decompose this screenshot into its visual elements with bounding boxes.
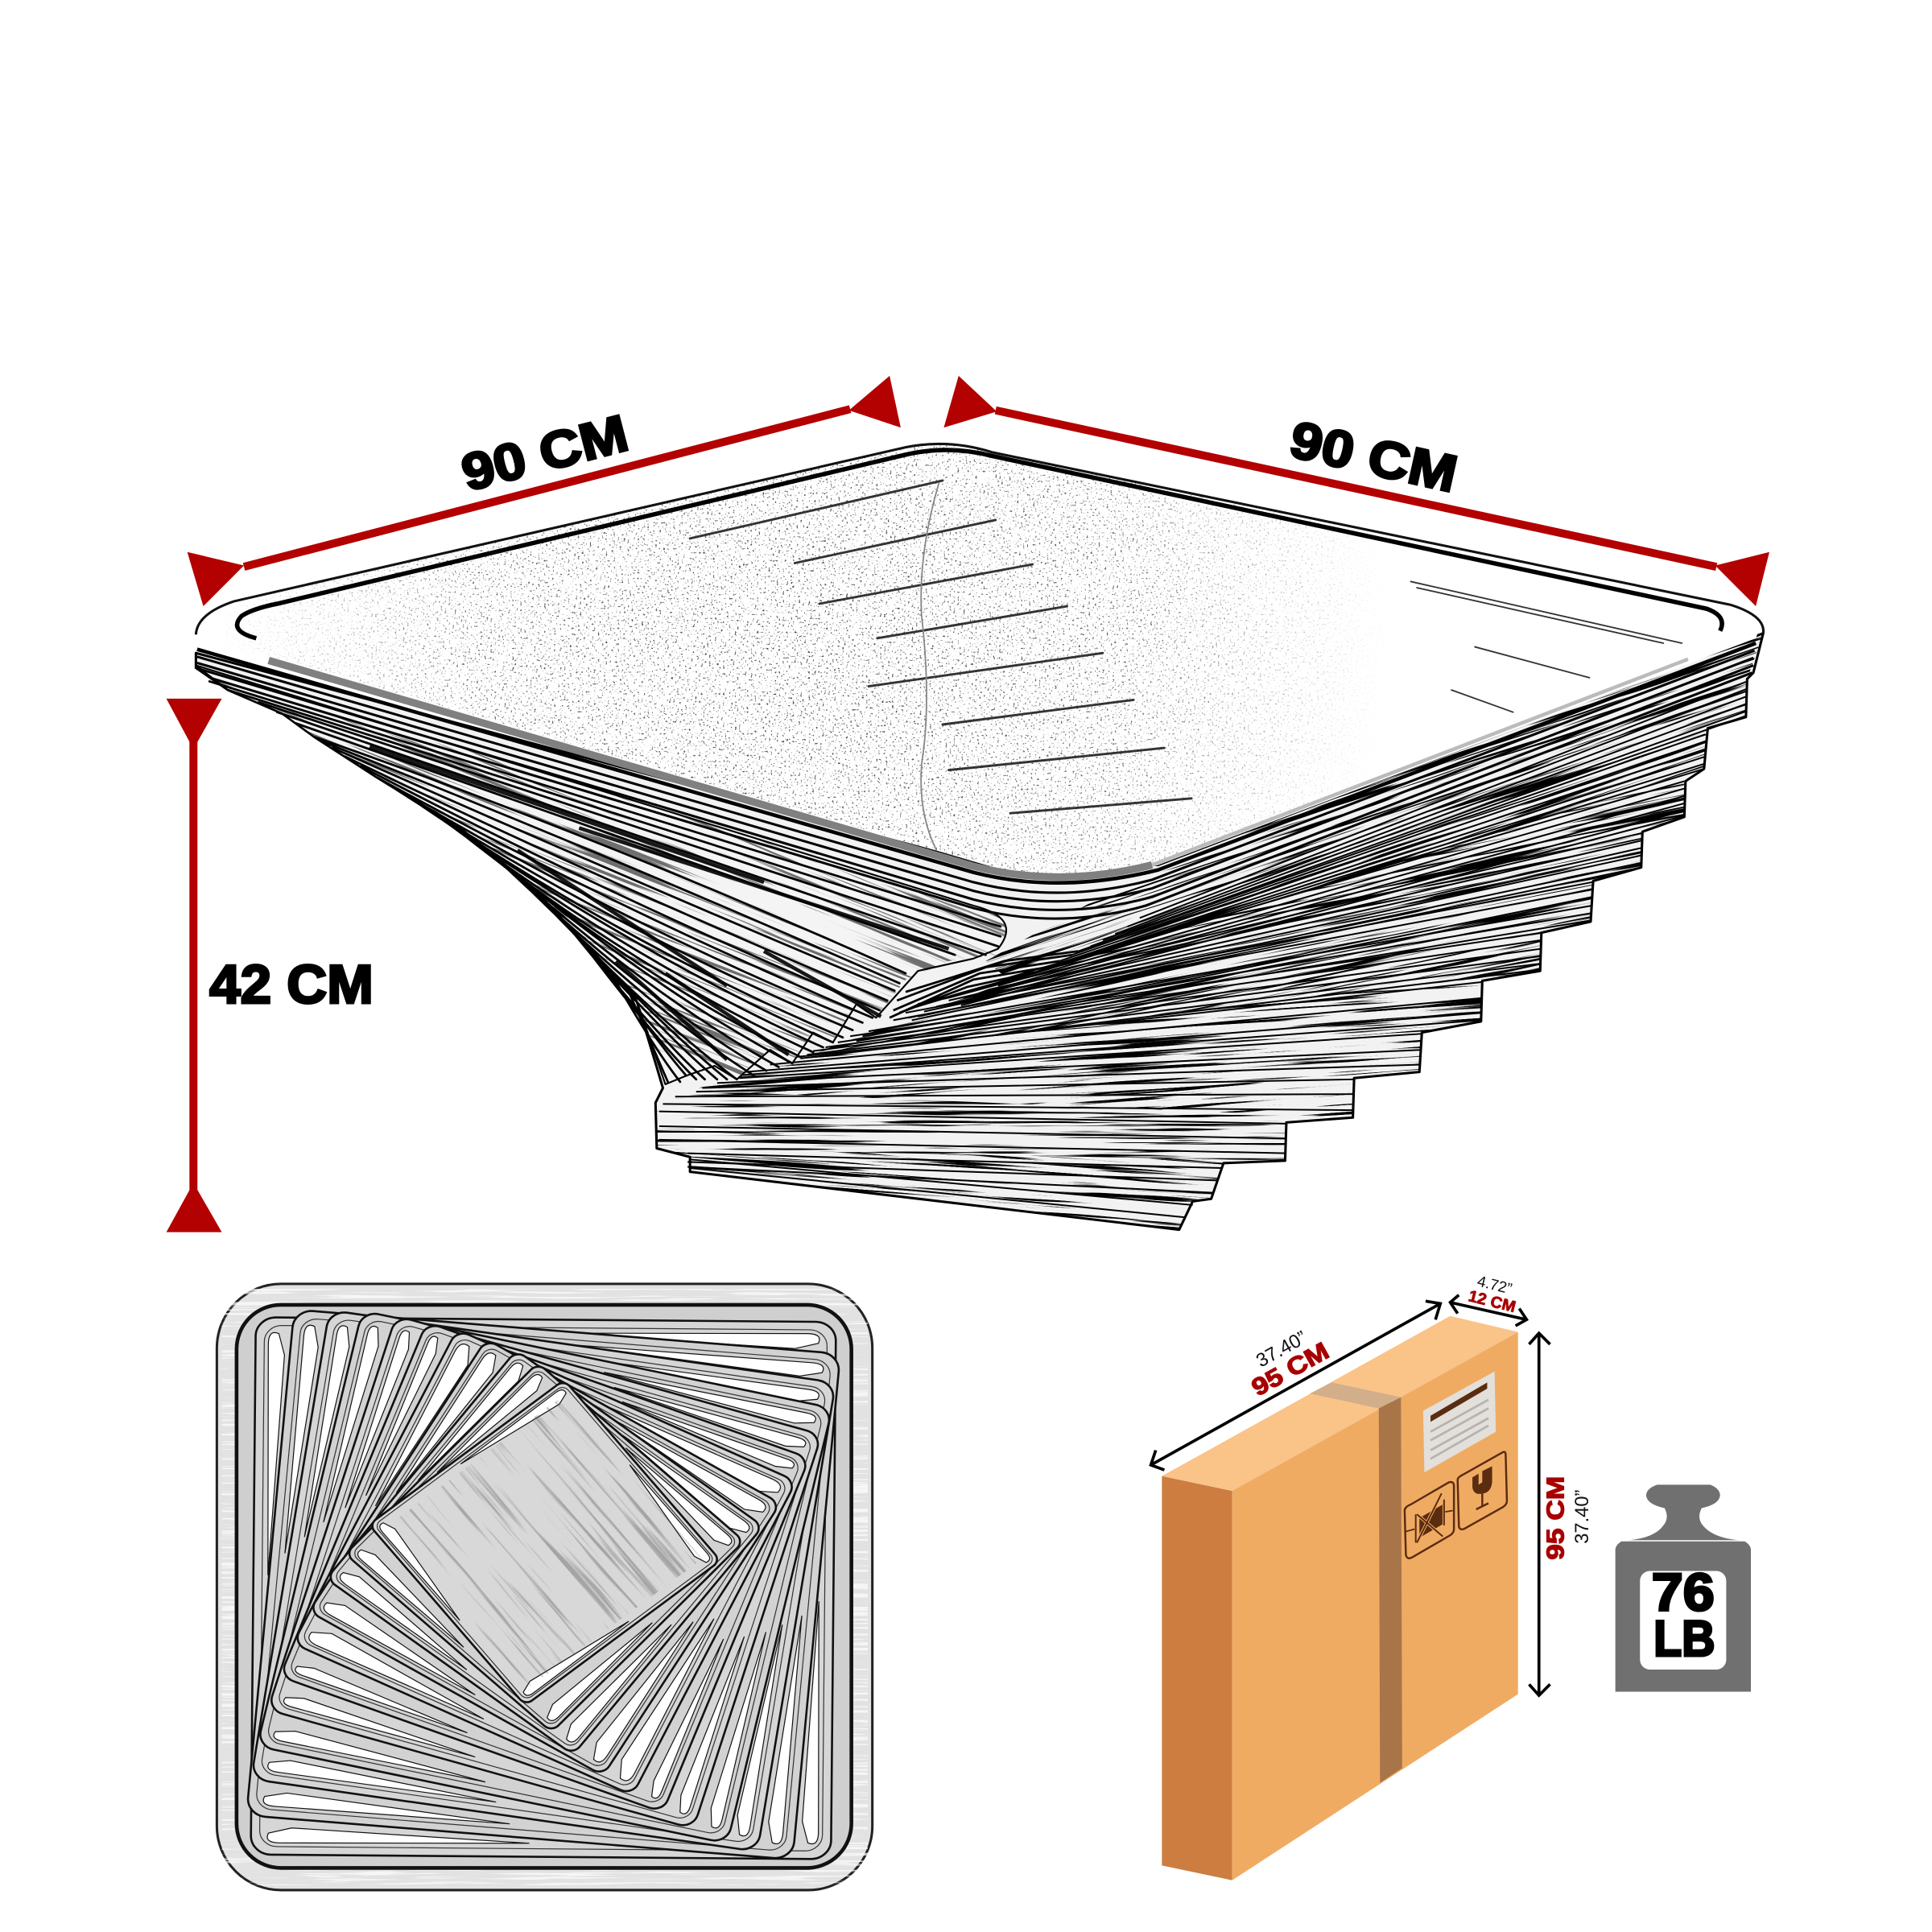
label: box length inches: 37.40” xyxy=(1253,1327,1311,1372)
label: box depth cm: 12 CM xyxy=(1467,1287,1517,1316)
tape on front xyxy=(1379,1397,1402,1783)
tier lines behind the fan corner xyxy=(890,952,1078,1018)
top tray surface xyxy=(196,437,1764,887)
arrow: top left 90 cm xyxy=(188,376,901,606)
label: 90 cm left: 90 CM xyxy=(456,404,634,502)
icon: do not compress xyxy=(1405,1482,1454,1558)
label: box depth inches: 4.72” xyxy=(1476,1274,1513,1298)
icon: weight 76 lb xyxy=(1616,1484,1751,1692)
shipping label xyxy=(1423,1372,1496,1472)
center tray xyxy=(369,1380,720,1706)
panel: shipping box xyxy=(1162,1316,1518,1880)
outer tray frame xyxy=(217,1284,873,1890)
weight label plate xyxy=(1640,1571,1726,1670)
stack silhouette xyxy=(196,634,1763,1230)
surface ribs xyxy=(690,481,1682,850)
label: box height inches: 37.40” xyxy=(1572,1489,1593,1544)
panel: stacked trays perspective view xyxy=(195,443,1765,1232)
box front face xyxy=(1232,1332,1518,1880)
frame streak texture xyxy=(222,1289,868,1885)
fan fine streak texture xyxy=(200,668,1006,1075)
box side face xyxy=(1162,1476,1232,1880)
label: 42 cm: 42 CM xyxy=(209,955,374,1015)
tray rim outline xyxy=(196,444,1764,634)
engraved streak texture on right tiers xyxy=(657,637,1761,1228)
icon: fragile glass xyxy=(1458,1452,1507,1530)
arrow: height 42 cm xyxy=(167,699,222,1232)
inner tray frame xyxy=(237,1305,852,1868)
label: box length cm: 95 CM xyxy=(1247,1337,1334,1402)
arrow: top right 90 cm xyxy=(943,376,1769,606)
center wood grain xyxy=(387,1397,702,1688)
panel: nested trays top view xyxy=(217,1284,873,1890)
arrow: box length xyxy=(1151,1301,1440,1470)
tray layered rim lines xyxy=(197,643,1756,919)
arrow: box height xyxy=(1529,1333,1550,1695)
stack left fan of tray edges xyxy=(196,665,1008,1085)
surface speckle xyxy=(225,445,1377,873)
weight unit: LB xyxy=(1653,1611,1715,1667)
stack right side tiers xyxy=(659,681,1747,1217)
arrow: box depth xyxy=(1451,1295,1526,1326)
tape on top xyxy=(1310,1382,1401,1408)
weight value: 76 xyxy=(1652,1563,1715,1622)
dark tray layer accents xyxy=(369,747,949,1059)
infographic canvas xyxy=(166,375,1769,1892)
front rim band xyxy=(269,660,1152,877)
box top face xyxy=(1162,1316,1518,1491)
label: 90 cm right: 90 CM xyxy=(1285,410,1463,503)
label: box height cm: 95 CM xyxy=(1542,1476,1569,1560)
spiral of rotated trays xyxy=(246,1310,840,1860)
